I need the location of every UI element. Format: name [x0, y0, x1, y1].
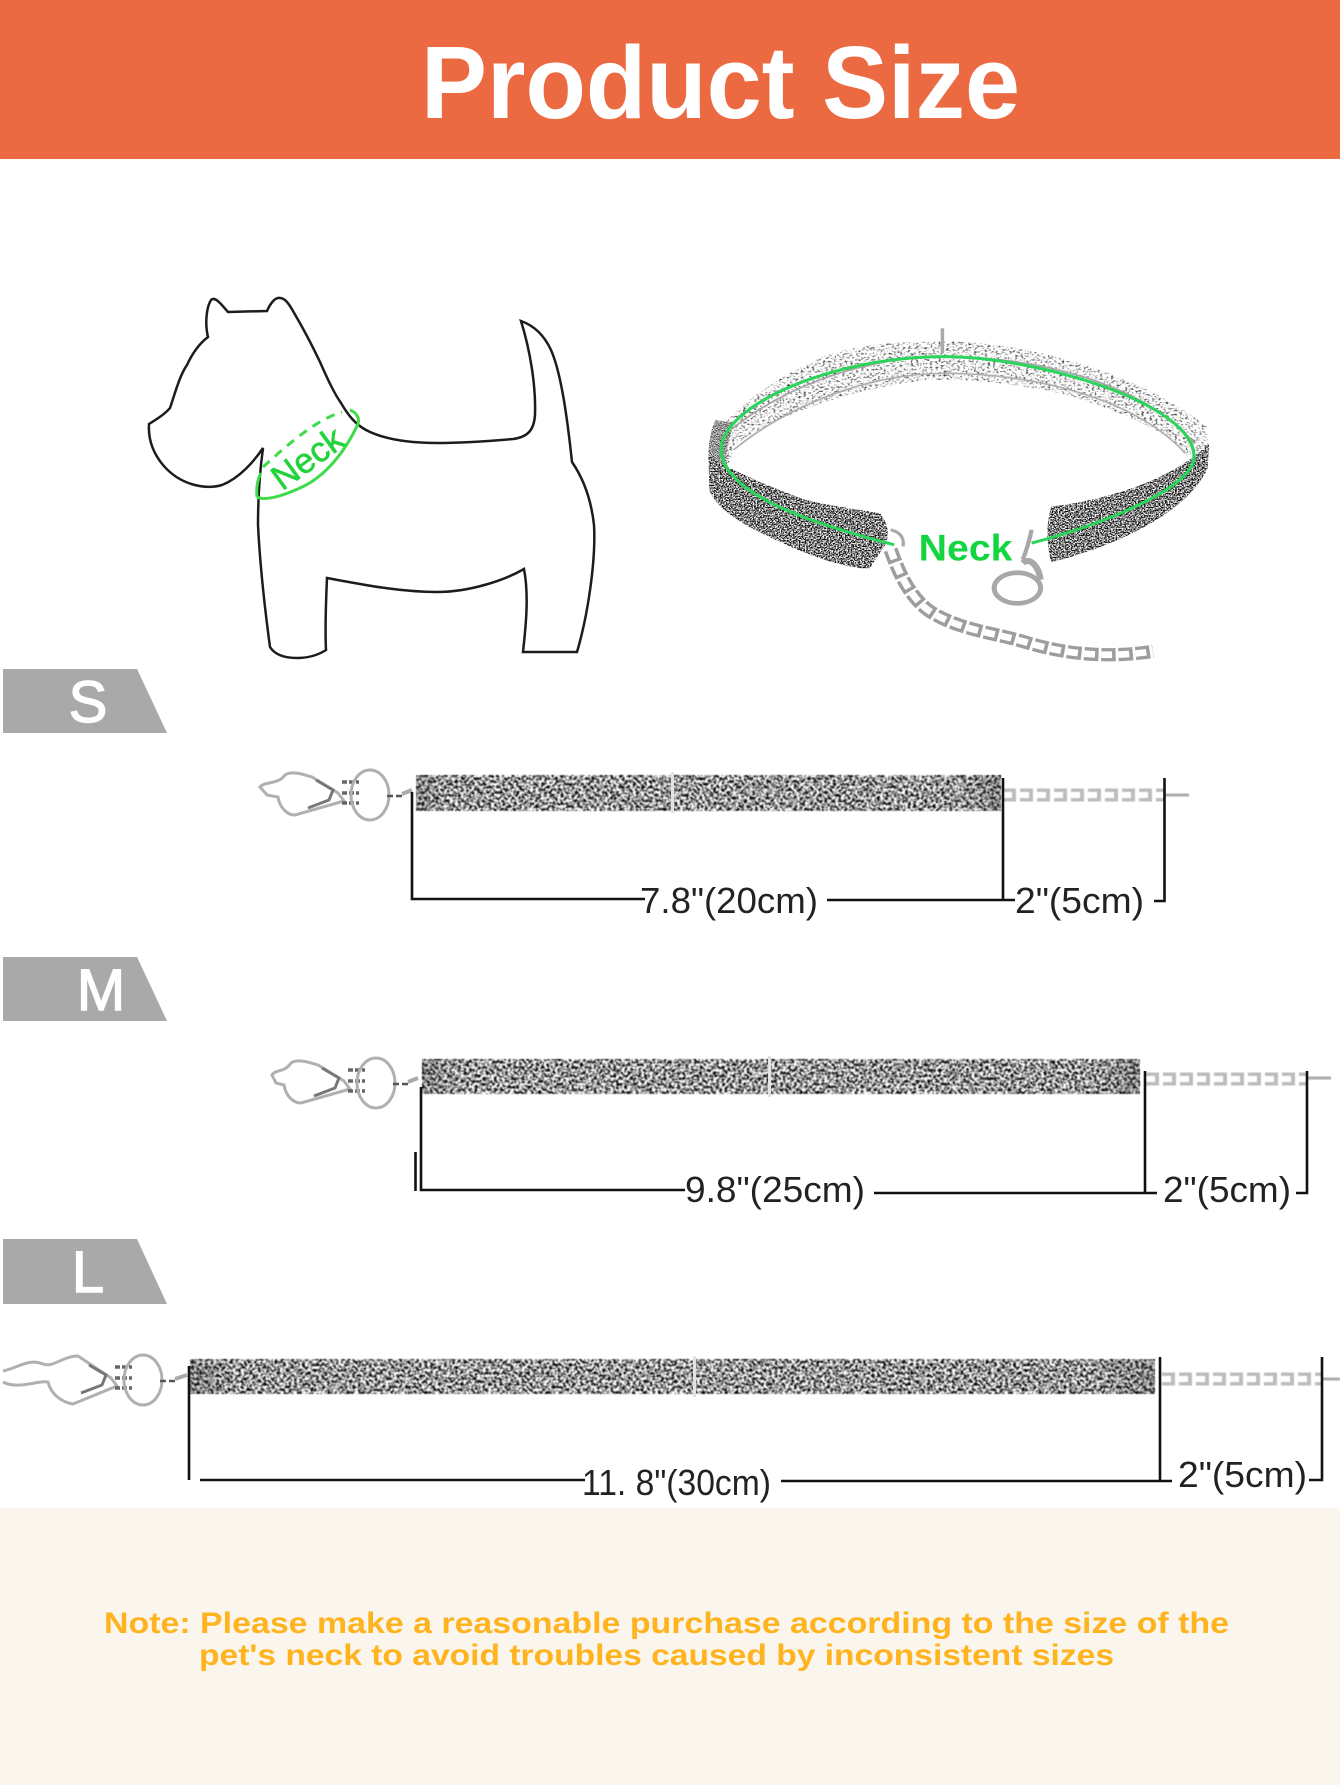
- collar L: [3, 1355, 1340, 1405]
- rear strands: [709, 328, 1208, 463]
- chain label L: 2"(5cm): [1178, 1454, 1307, 1495]
- left end of ring: [708, 420, 734, 476]
- dimension lines M: [416, 1071, 1307, 1193]
- clasp: [3, 1355, 187, 1405]
- length label L: 11. 8"(30cm): [582, 1462, 771, 1503]
- front left band: [709, 457, 888, 569]
- size tag L: L: [72, 1240, 104, 1305]
- chain: [1146, 1078, 1331, 1079]
- collar photo with neck measure: [708, 328, 1209, 655]
- length label S: 7.8"(20cm): [640, 880, 818, 921]
- size tag L: [3, 1239, 167, 1305]
- size tag M: M: [77, 958, 125, 1023]
- neck marker: [257, 410, 359, 499]
- title: Product Size: [421, 25, 1020, 140]
- lobster clasp: [891, 530, 1041, 603]
- size row: S: [3, 669, 1189, 921]
- chain label S: 2"(5cm): [1015, 880, 1144, 921]
- clasp: [260, 770, 412, 820]
- dog outline with neck marker: [149, 298, 594, 658]
- note text: [104, 1607, 1229, 1672]
- size tag M: [3, 957, 167, 1023]
- collar M: [272, 1056, 1331, 1108]
- dimension lines S: [412, 778, 1164, 901]
- extension chain: [891, 550, 1153, 655]
- dimension lines L: [189, 1357, 1322, 1481]
- footer note panel: [0, 1508, 1340, 1785]
- note text: Note: Please make a reasonable purchase according to the size of the: [104, 1607, 1229, 1640]
- size tag S: [3, 669, 167, 735]
- band: [416, 775, 1001, 811]
- size row: L: [3, 1239, 1340, 1503]
- dog silhouette: [149, 298, 594, 658]
- header banner: [0, 0, 1340, 159]
- collar S: [260, 770, 1189, 820]
- front right band: [1047, 443, 1209, 562]
- length label M: 9.8"(25cm): [685, 1169, 865, 1210]
- neck label: Neck: [264, 419, 352, 498]
- green neck line: [721, 357, 1194, 545]
- chain: [1003, 788, 1189, 802]
- chain label M: 2"(5cm): [1163, 1169, 1291, 1210]
- note text: pet's neck to avoid troubles caused by inconsistent sizes: [199, 1639, 1114, 1672]
- clasp: [272, 1058, 418, 1108]
- size tag S: S: [69, 670, 107, 735]
- neck label: Neck: [919, 529, 1013, 569]
- band: [190, 1359, 1155, 1394]
- band: [422, 1059, 1140, 1094]
- size row: M: [3, 957, 1331, 1210]
- chain: [1162, 1372, 1340, 1386]
